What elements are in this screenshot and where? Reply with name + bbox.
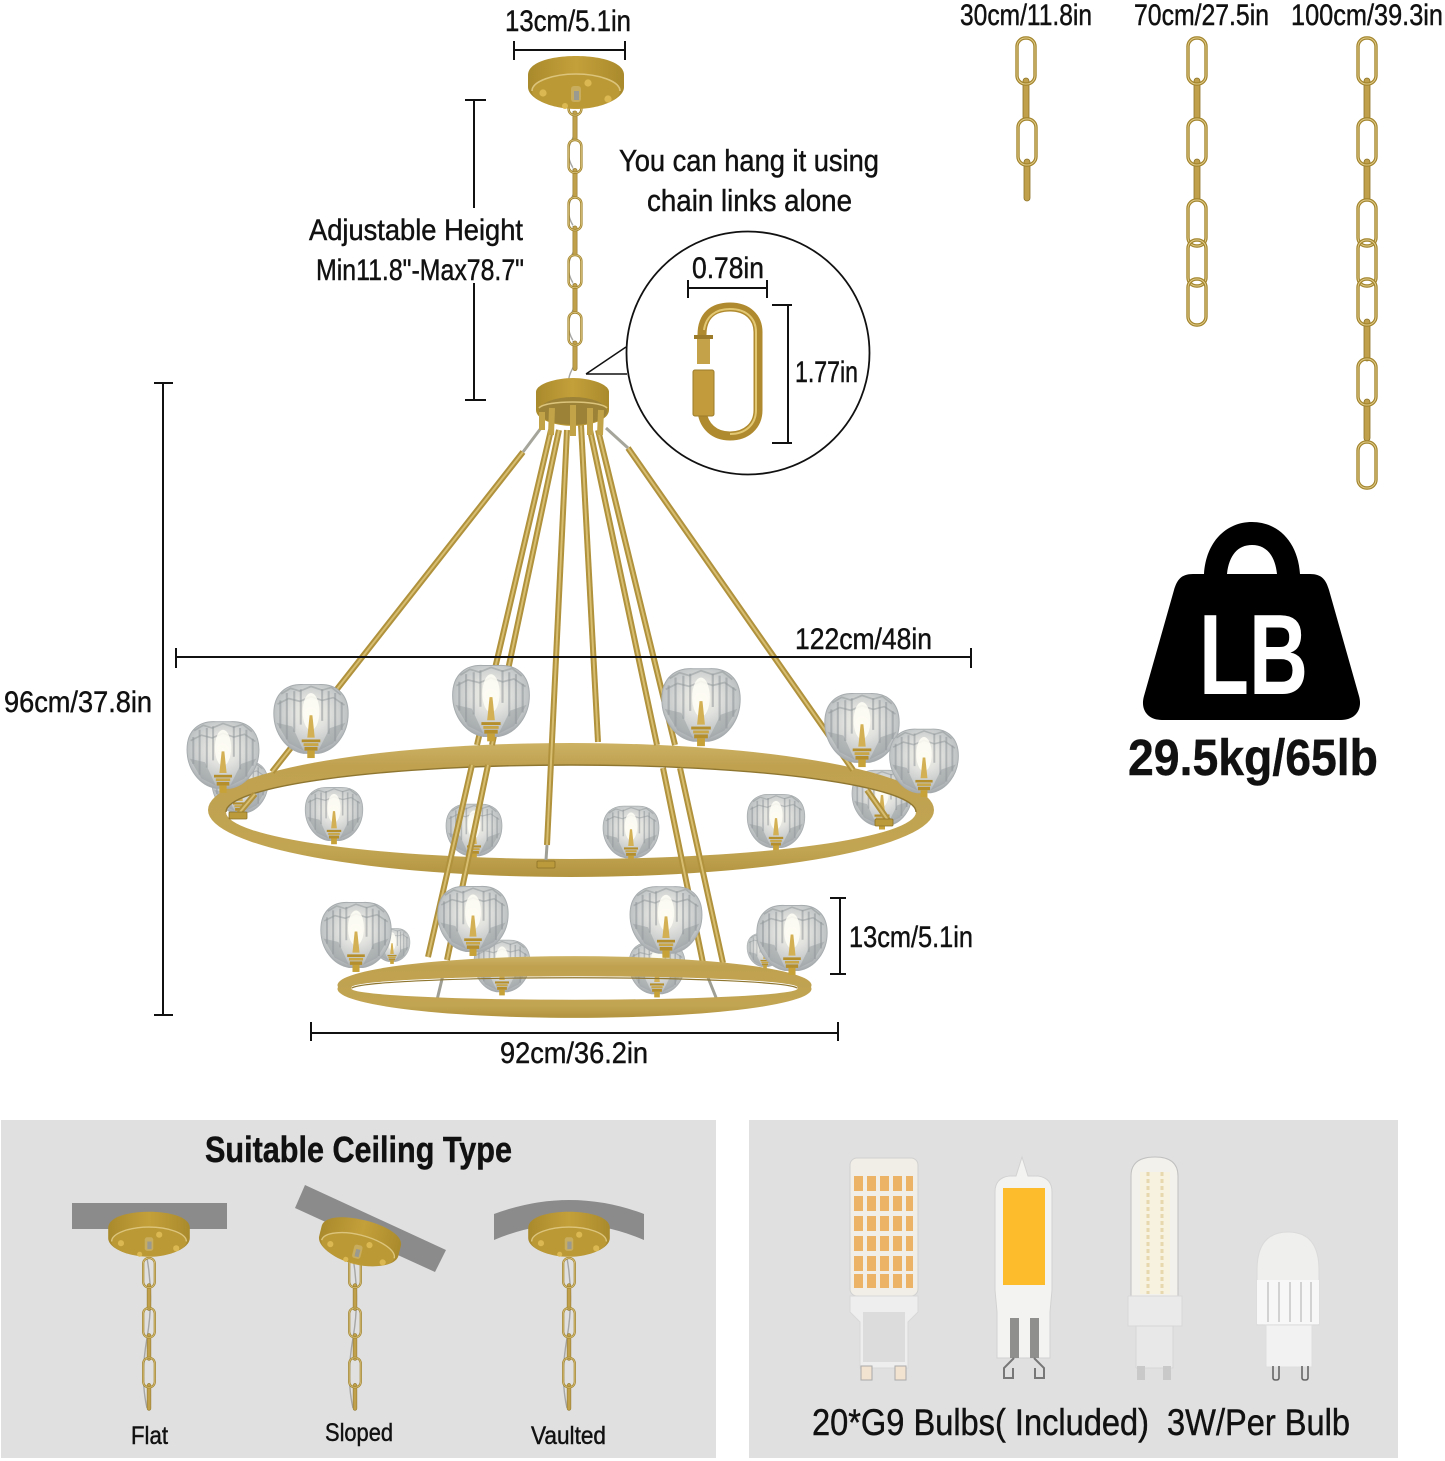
icon: weight — [1143, 522, 1360, 720]
panel: bulbs — [749, 1120, 1398, 1458]
dimension: lower ring diameter — [311, 1022, 838, 1070]
callout: carabiner detail: 0.78in — [692, 252, 764, 285]
caption: bulbs: 20*G9 Bulbs( Included) 3W/Per Bulb — [812, 1402, 1350, 1443]
chain option: 70cm — [1134, 0, 1269, 325]
icon: weight: LB — [1199, 592, 1308, 719]
label: vaulted: Vaulted — [531, 1422, 606, 1450]
dimension: upper ring diameter: 122cm/48in — [795, 623, 932, 656]
note: chain links: You can hang it using — [619, 143, 879, 178]
back globes upper ring — [212, 761, 912, 861]
dimension: adjustable height — [309, 100, 524, 400]
chandelier — [187, 56, 958, 1018]
bulb 1: LED corn — [850, 1158, 918, 1380]
weight value: 29.5kg/65lb — [1128, 729, 1378, 786]
label: sloped: Sloped — [325, 1419, 393, 1447]
bulb 2: COB capsule — [995, 1157, 1052, 1378]
vaulted ceiling illustration — [494, 1200, 644, 1410]
callout: carabiner detail: 1.77in — [795, 356, 858, 389]
suspension rods — [240, 425, 890, 963]
note: chain links — [619, 143, 879, 218]
dimension: adjustable height: Adjustable Height — [309, 214, 524, 247]
note: chain links: chain links alone — [647, 183, 852, 218]
front globes lower ring — [321, 886, 827, 975]
dimension: adjustable height: Min11.8"-Max78.7" — [316, 254, 524, 287]
bulb 4: ceramic mini — [1257, 1232, 1319, 1380]
hub — [523, 378, 628, 452]
icon: carabiner — [693, 307, 758, 436]
label: flat: Flat — [131, 1422, 168, 1450]
back globes lower ring — [374, 928, 783, 997]
dimension: globe height: 13cm/5.1in — [849, 921, 973, 954]
flat ceiling illustration — [72, 1203, 227, 1410]
bulb 3: slim filament — [1128, 1157, 1182, 1380]
lower ring — [338, 956, 812, 1018]
dimension: total height — [4, 383, 173, 1015]
ceiling canopy — [528, 56, 624, 109]
dimension: canopy width — [505, 5, 631, 60]
dimension: lower ring diameter: 92cm/36.2in — [500, 1037, 648, 1070]
heading: suitable ceiling type: Suitable Ceiling Type — [205, 1129, 512, 1170]
upper ring — [208, 743, 934, 877]
sloped ceiling illustration — [295, 1185, 446, 1410]
dimension: total height: 96cm/37.8in — [4, 686, 152, 719]
callout: carabiner detail — [586, 232, 870, 474]
dimension: upper ring diameter — [176, 623, 971, 668]
dimension: canopy width: 13cm/5.1in — [505, 5, 631, 38]
front globes upper ring — [187, 665, 958, 797]
dimension: globe height — [830, 898, 973, 974]
chain option: 100cm — [1291, 0, 1443, 488]
chain option: 30cm — [960, 0, 1092, 201]
main hanging chain — [568, 82, 581, 398]
panel: ceiling types — [1, 1120, 716, 1458]
ring hooks and brackets — [229, 812, 893, 1007]
